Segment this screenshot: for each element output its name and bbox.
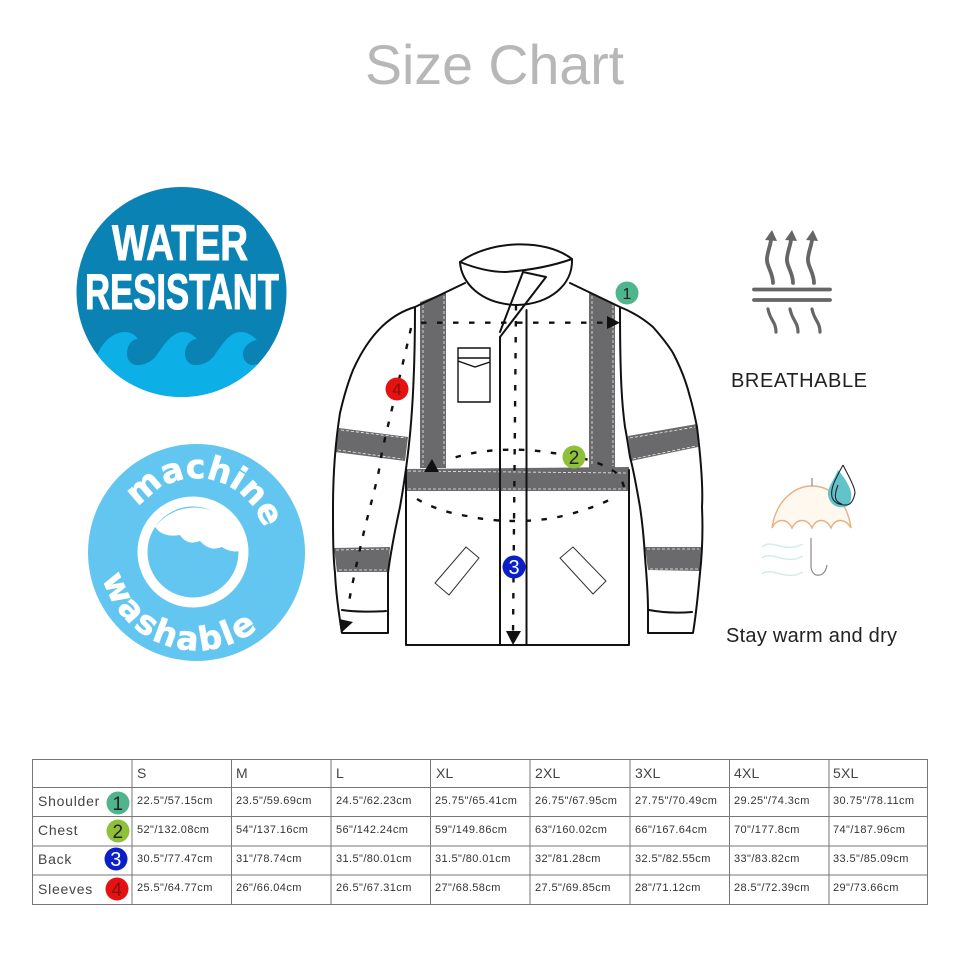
icon: breathable [754, 230, 830, 332]
header row: 4XL [734, 765, 760, 781]
waves [97, 332, 258, 397]
row: sleeves: 27.5"/69.85cm [535, 882, 611, 894]
row: shoulder: 23.5"/59.69cm [236, 795, 312, 807]
marker 3: 3 [508, 557, 520, 579]
badge: water resistant [76, 187, 286, 397]
title: Size Chart [365, 34, 625, 96]
resistant text: RESISTANT [85, 264, 279, 320]
row: chest: 54"/137.16cm [236, 824, 308, 836]
marker 4 [386, 378, 408, 400]
washable text: washable [104, 572, 256, 651]
stay warm label: Stay warm and dry [726, 625, 897, 647]
row: back: 32"/81.28cm [535, 853, 601, 865]
row: chest: 70"/177.8cm [734, 824, 800, 836]
drum ring and foam [142, 502, 244, 602]
row: chest: 66"/167.64cm [635, 824, 707, 836]
row: sleeves: 26"/66.04cm [236, 882, 302, 894]
row: shoulder [38, 792, 914, 815]
row: shoulder: 22.5"/57.15cm [137, 795, 213, 807]
row: sleeves: Sleeves [38, 881, 93, 897]
row: chest: 63"/160.02cm [535, 824, 607, 836]
row: shoulder: 25.75"/65.41cm [435, 795, 517, 807]
row: sleeves: 27"/68.58cm [435, 882, 501, 894]
badge: machine washable [88, 444, 305, 661]
row: shoulder: 26.75"/67.95cm [535, 795, 617, 807]
marker 3 [502, 556, 526, 579]
row: chest: 56"/142.24cm [336, 824, 408, 836]
row: shoulder: 24.5"/62.23cm [336, 795, 412, 807]
row: chest: 52"/132.08cm [137, 824, 209, 836]
breathable label: BREATHABLE [731, 370, 867, 392]
icon: umbrella with drop [762, 465, 855, 575]
marker 2 [562, 446, 586, 469]
marker 2: 2 [569, 448, 579, 469]
measurement line: chest [417, 450, 624, 521]
header row: M [236, 765, 248, 781]
row: back: 31"/78.74cm [236, 853, 302, 865]
row: shoulder: Shoulder [38, 793, 100, 809]
marker 4: 4 [392, 380, 402, 399]
header row: XL [436, 765, 454, 781]
machine text: machine [127, 454, 278, 526]
row: back: 33.5"/85.09cm [833, 853, 909, 865]
row: shoulder: 29.25"/74.3cm [734, 795, 810, 807]
table grid [32, 760, 928, 904]
header row: 5XL [833, 765, 859, 781]
row: back: 31.5"/80.01cm [336, 853, 412, 865]
row: sleeves: 28"/71.12cm [635, 882, 701, 894]
row: back: 30.5"/77.47cm [137, 853, 213, 865]
marker 1 [616, 282, 638, 304]
row: back: 31.5"/80.01cm [435, 853, 511, 865]
header row: 2XL [535, 765, 561, 781]
jacket outline [460, 244, 572, 272]
side pockets [435, 547, 606, 595]
row: shoulder: 30.75"/78.11cm [833, 795, 914, 807]
marker 1: 1 [623, 286, 632, 303]
row: back [38, 848, 909, 871]
row: back: 3 [110, 849, 122, 871]
row: chest: 2 [113, 822, 123, 843]
header row: L [336, 765, 344, 781]
measurement line: shoulder [421, 316, 620, 329]
row: sleeves: 4 [112, 880, 123, 901]
reflective strips [334, 292, 701, 572]
row: back: Back [38, 851, 72, 867]
row: chest [38, 820, 905, 843]
row: shoulder: 27.75"/70.49cm [635, 795, 717, 807]
jacket diagram [333, 244, 702, 645]
row: sleeves: 28.5"/72.39cm [734, 882, 810, 894]
measurement line: back [506, 305, 521, 645]
row: back: 32.5"/82.55cm [635, 853, 711, 865]
chest pocket [458, 348, 490, 402]
row: shoulder: 1 [113, 794, 123, 815]
header row [137, 765, 859, 781]
row: sleeves: 25.5"/64.77cm [137, 882, 213, 894]
header row: 3XL [635, 765, 661, 781]
row: back: 33"/83.82cm [734, 853, 800, 865]
header row: S [137, 765, 147, 781]
row: chest: 59"/149.86cm [435, 824, 507, 836]
measurement line: sleeve [339, 328, 411, 633]
row: sleeves: 26.5"/67.31cm [336, 882, 412, 894]
water text: WATER [112, 215, 248, 271]
row: sleeves: 29"/73.66cm [833, 882, 899, 894]
row: chest: Chest [38, 822, 78, 838]
row: sleeves [38, 878, 899, 901]
size table [32, 760, 928, 904]
row: chest: 74"/187.96cm [833, 824, 905, 836]
